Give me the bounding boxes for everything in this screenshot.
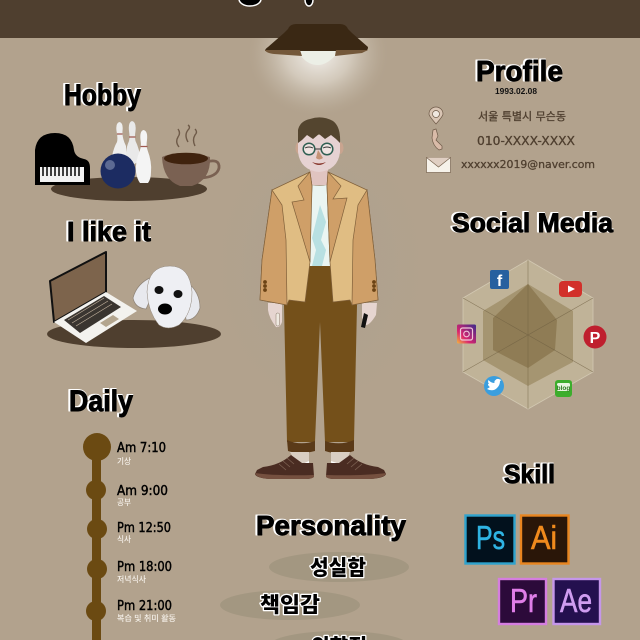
- neck: [310, 165, 328, 185]
- heading: Social Media: Social Media: [452, 208, 614, 238]
- trait: 성실함: 성실함: [310, 552, 366, 582]
- personality list: [220, 552, 409, 640]
- icon: Pinterest: P: [590, 330, 601, 347]
- icon: blog: blog: [557, 385, 570, 392]
- trait: 책임감: 책임감: [260, 589, 320, 619]
- email: xxxxxx2019@naver.com: [461, 158, 595, 171]
- entry: 21:00: Pm 21:00: [117, 599, 172, 614]
- trait: 외향적: [269, 631, 409, 640]
- icon: Photoshop: Ps: [476, 519, 505, 556]
- trait: 성실함: [269, 552, 409, 582]
- lamp shade: [265, 24, 368, 51]
- icon: coffee cup: [162, 125, 219, 186]
- entry: 21:00: 복습 및 취미 활동: [117, 613, 176, 624]
- icon: laptop: [50, 252, 137, 343]
- icon: After Effects: Ae: [560, 582, 592, 619]
- heading: Daily: Daily: [69, 385, 133, 418]
- birth date: 1993.02.08: [495, 86, 537, 96]
- entry: 12:50: Pm 12:50: [117, 521, 171, 536]
- entry: 7:10: 기상: [117, 456, 132, 467]
- radar axes: [463, 260, 593, 409]
- entry: 7:10: [117, 441, 166, 467]
- icon: grand piano: [35, 133, 90, 185]
- light glow: [246, 0, 390, 118]
- heading: Profile: Profile: [476, 56, 563, 88]
- entry: 18:00: 저녁식사: [117, 574, 147, 585]
- heading: I like it: I like it: [67, 216, 151, 247]
- icon: Premiere: Pr: [510, 582, 537, 619]
- icon: Pinterest: [584, 326, 606, 348]
- icon: bowling ball: [100, 154, 136, 188]
- icon: location pin: [429, 107, 443, 124]
- entry: 12:50: [117, 521, 171, 545]
- entry: 7:10: Am 7:10: [117, 441, 166, 456]
- timeline spine: [83, 433, 111, 640]
- entry: 9:00: Am 9:00: [117, 484, 168, 499]
- heading: Skill: Skill: [504, 459, 555, 489]
- phone number: 010-XXXX-XXXX: [477, 134, 575, 148]
- entry: 18:00: Pm 18:00: [117, 560, 172, 575]
- radar chart: social media: [457, 260, 606, 409]
- jacket: [260, 172, 378, 305]
- entry: 12:50: 식사: [117, 534, 132, 545]
- icon: telephone: [432, 129, 442, 150]
- background centre shade: [150, 60, 490, 520]
- icon: Facebook: f: [497, 273, 503, 290]
- middle hexagon: [483, 284, 573, 386]
- socks: [290, 452, 350, 467]
- top banner: [0, 0, 640, 38]
- outer hexagon: [463, 260, 593, 409]
- trait: 책임감: [220, 589, 360, 620]
- liked things illustration: [47, 252, 221, 348]
- daily timeline: [83, 433, 176, 640]
- hobby illustration: [35, 121, 219, 201]
- pen in hand: [276, 313, 280, 326]
- right shoe: [326, 455, 386, 479]
- entry: 18:00: [117, 560, 172, 585]
- phone in hand: [361, 313, 368, 328]
- trousers: [284, 262, 357, 454]
- hands: [268, 303, 377, 327]
- icon: envelope: [426, 158, 450, 172]
- icon: Instagram: [457, 324, 476, 344]
- skill icons: [466, 516, 600, 624]
- ceiling lamp: [265, 24, 368, 65]
- head: [296, 117, 344, 172]
- character illustration: [255, 117, 386, 479]
- profile details: [426, 86, 595, 172]
- left shoe: [255, 455, 314, 479]
- address: 서울 특별시 무슨동: [478, 110, 566, 123]
- icon: Illustrator: Ai: [531, 519, 557, 556]
- entry: 9:00: 공부: [117, 497, 131, 508]
- icon: Facebook: [490, 270, 509, 290]
- heading: Personality: Personality: [256, 510, 406, 541]
- shirt: [309, 185, 331, 266]
- icon: YouTube: [559, 281, 582, 297]
- icon: blog: [555, 380, 572, 397]
- entry: 21:00: [117, 599, 176, 624]
- icon: white dog: [133, 266, 200, 328]
- shadow: [47, 320, 221, 348]
- entry: 9:00: [117, 484, 168, 508]
- lamp bulb: [300, 49, 336, 65]
- icon: bowling pins: [112, 121, 151, 183]
- inner value polygon: [493, 284, 557, 368]
- shadow: [51, 177, 207, 201]
- heading: Hobby: Hobby: [64, 79, 141, 112]
- icon: Twitter: [484, 376, 504, 396]
